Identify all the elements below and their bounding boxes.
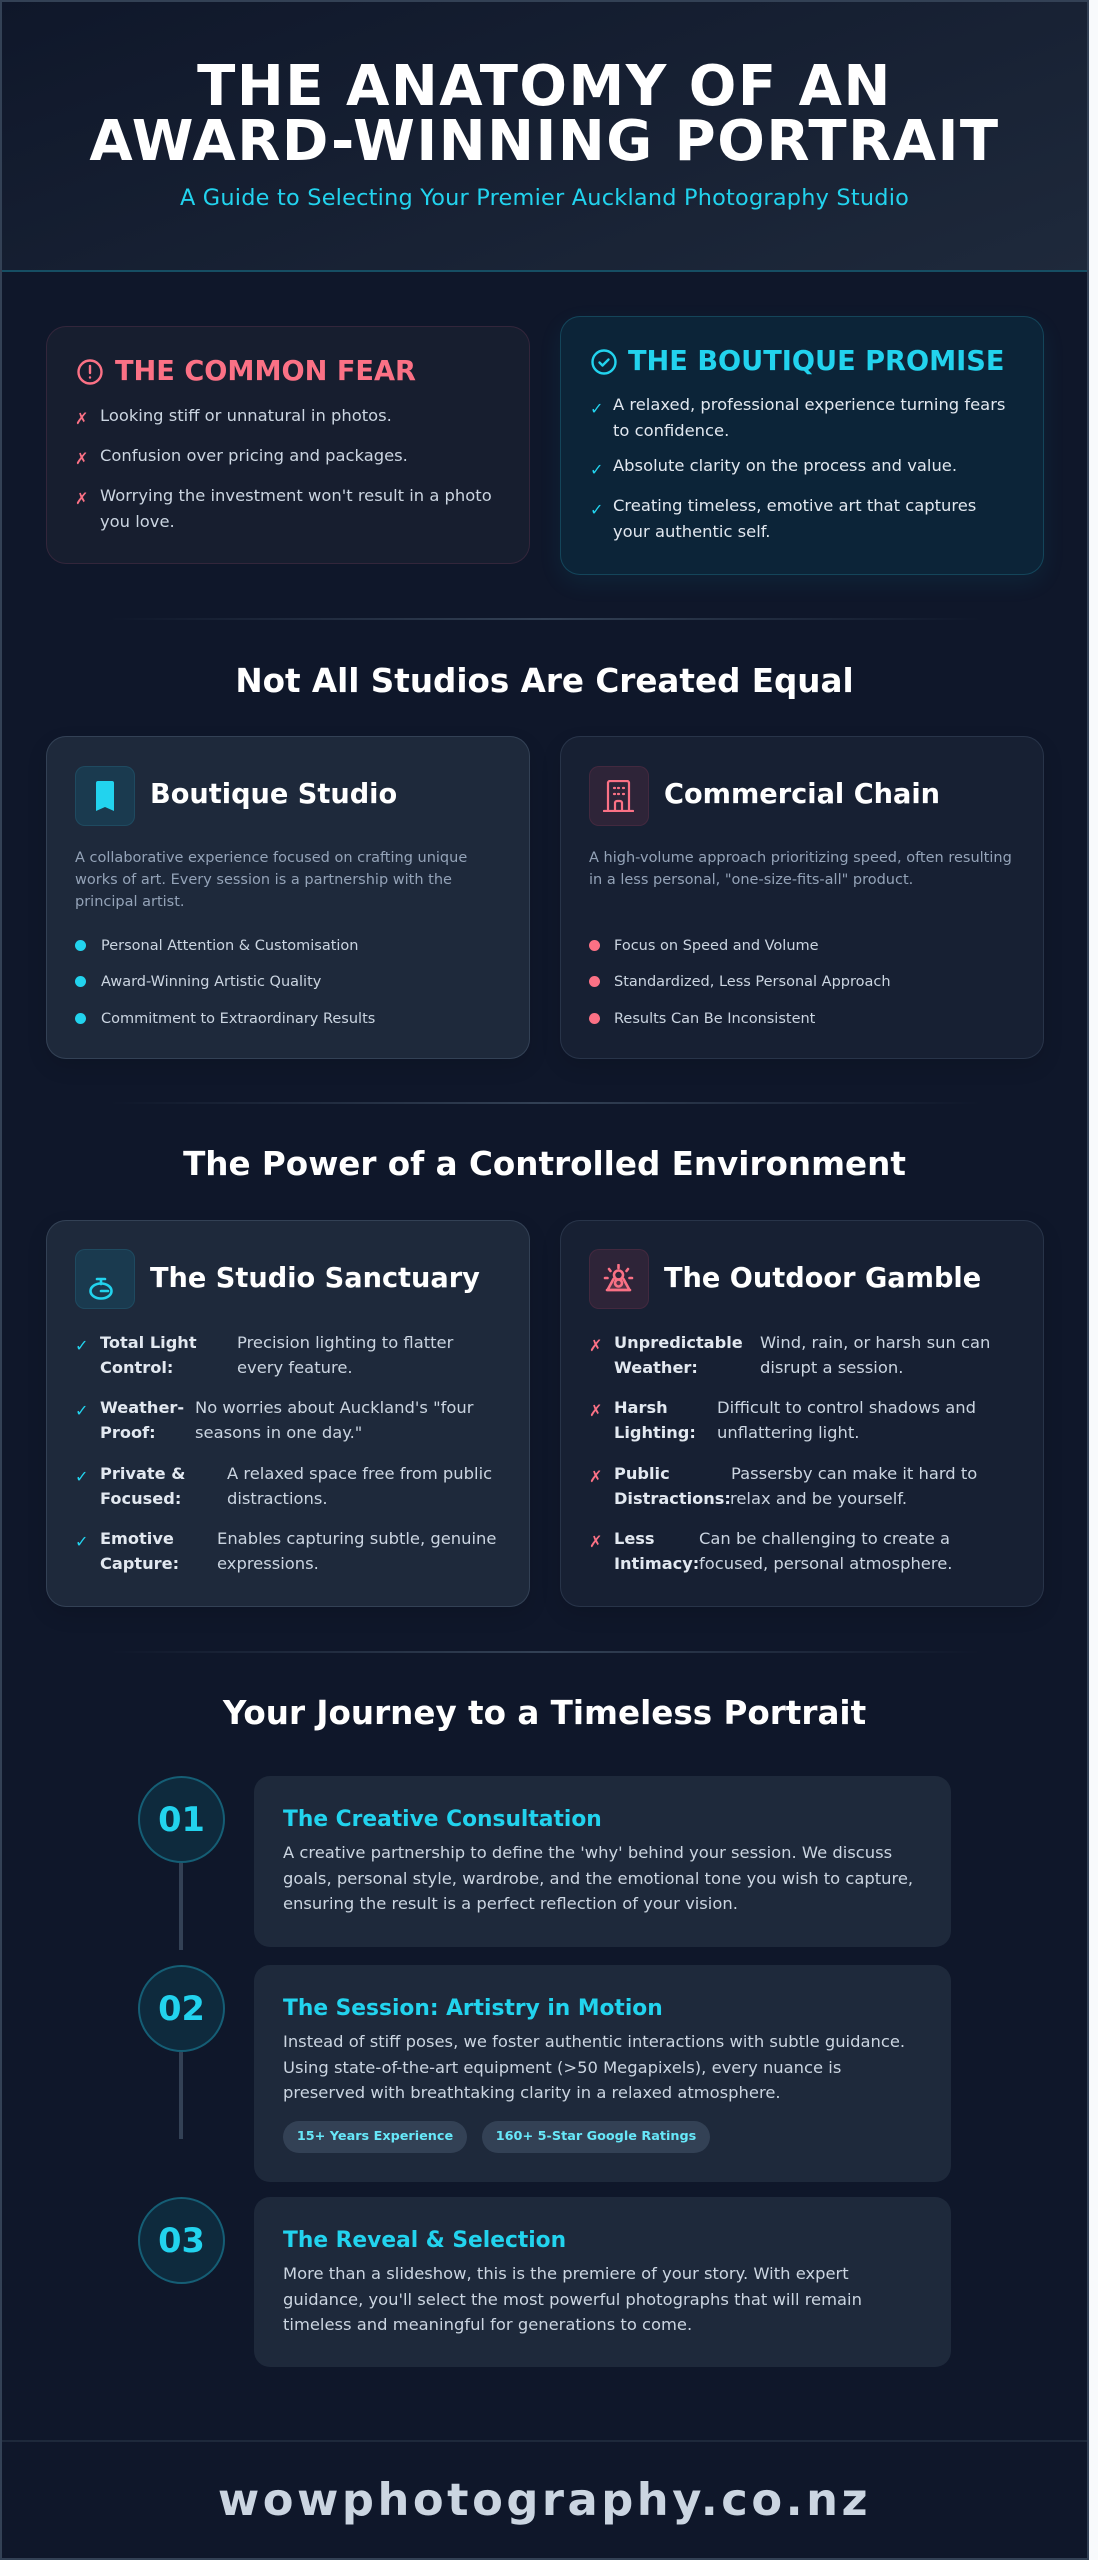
item: harsh lighting: [589, 1398, 976, 1442]
item: harsh lighting: Lighting:: [614, 1423, 696, 1442]
item: emotive capture: Enables capturing subtle, genuine: [217, 1529, 496, 1548]
badge: experience: 15+ Years Experience: [297, 2129, 453, 2144]
step text: guidance, you'll select the most powerful photographs that will remain: [283, 2290, 862, 2308]
fear item 2: ✗: [75, 449, 88, 468]
item: harsh lighting: Harsh: [614, 1398, 668, 1417]
item: total light control: ✓: [75, 1336, 88, 1355]
step title: The Session: Artistry in Motion: [283, 1996, 663, 2021]
panel: studio sanctuary: [46, 1220, 530, 1607]
card title: The Outdoor Gamble: [664, 1263, 981, 1294]
item: less intimacy: focused, personal atmosphere.: [699, 1554, 952, 1573]
header: [0, 0, 1089, 272]
step text: [283, 2264, 862, 2334]
step text: goals, personal style, wardrobe, and the emotional tone you wish to capture,: [283, 1868, 913, 1888]
step 1 number: 01: [158, 1800, 205, 1839]
icon: studio: [75, 1249, 135, 1309]
item: weather-proof: Weather-: [100, 1398, 184, 1417]
item: emotive capture: Emotive: [100, 1529, 174, 1548]
step 3 number: [138, 2197, 225, 2284]
promise item 3: your authentic self.: [613, 522, 770, 541]
card title: The Studio Sanctuary: [150, 1263, 480, 1294]
icon: check circle: [591, 349, 617, 375]
fear item 3: ✗: [75, 489, 88, 508]
footer website: wowphotography.co.nz: [218, 2473, 871, 2526]
item: unpredictable weather: Weather:: [614, 1358, 698, 1377]
item: public distractions: Public: [614, 1464, 670, 1483]
item: unpredictable weather: Wind, rain, or harsh sun can: [760, 1333, 990, 1352]
item: weather-proof: seasons in one day.": [195, 1423, 362, 1442]
badge: ratings: 160+ 5-Star Google Ratings: [496, 2129, 696, 2144]
footer: [0, 2440, 1089, 2560]
heading: the boutique promise: THE BOUTIQUE PROMISE: [628, 346, 1004, 377]
item: weather-proof: [75, 1398, 474, 1442]
item: emotive capture: expressions.: [217, 1554, 319, 1573]
fear item 3: you love.: [100, 512, 175, 531]
item: harsh lighting: Difficult to control shadows and: [717, 1398, 976, 1417]
item: public distractions: relax and be yourself.: [730, 1489, 907, 1508]
item: emotive capture: Capture:: [100, 1554, 179, 1573]
promise item 1: to confidence.: [613, 421, 729, 440]
item: weather-proof: Proof:: [100, 1423, 156, 1442]
panel: boutique studio: [46, 736, 530, 1059]
item: less intimacy: Less: [614, 1529, 655, 1548]
item: total light control: Total Light: [100, 1333, 197, 1352]
item: weather-proof: No worries about Auckland's "four: [195, 1398, 473, 1417]
promise item 2: Absolute clarity on the process and value.: [613, 456, 957, 475]
fear item 1: ✗: [75, 409, 88, 428]
heading: the common fear: THE COMMON FEAR: [115, 356, 416, 387]
badge: ratings: [482, 2121, 710, 2153]
item: total light control: [75, 1333, 454, 1377]
promise item 3: ✓: [590, 500, 603, 519]
step title: The Creative Consultation: [283, 1807, 602, 1832]
item: less intimacy: Intimacy:: [614, 1554, 699, 1573]
fear item 2: Confusion over pricing and packages.: [100, 446, 408, 465]
item: total light control: Precision lighting to flatter: [237, 1333, 453, 1352]
item: emotive capture: [75, 1529, 496, 1573]
description: A collaborative experience focused on crafting unique: [75, 850, 467, 866]
badge: experience: [283, 2121, 467, 2153]
icon: outdoor: [589, 1249, 649, 1309]
step text: More than a slideshow, this is the premiere of your story. With expert: [283, 2264, 849, 2283]
item: private and focused: A relaxed space free from public: [227, 1464, 492, 1483]
description: [589, 850, 1012, 888]
step text: [283, 1843, 913, 1913]
step 1 number: [138, 1776, 225, 1863]
item: private and focused: Focused:: [100, 1489, 181, 1508]
panel: commercial chain: [560, 736, 1044, 1059]
description: in a less personal, "one-size-fits-all" product.: [589, 872, 913, 888]
step 2 number: [138, 1965, 225, 2052]
item: private and focused: [75, 1464, 492, 1508]
item: private and focused: distractions.: [227, 1489, 328, 1508]
item: harsh lighting: unflattering light.: [717, 1423, 860, 1442]
step text: A creative partnership to define the 'why' behind your session. We discuss: [283, 1843, 892, 1862]
step text: preserved with breathtaking clarity in a relaxed atmosphere.: [283, 2083, 781, 2102]
icon: building: [589, 766, 649, 826]
step 3 number: 03: [158, 2221, 205, 2260]
feature list: Award-Winning Artistic Quality: [101, 974, 321, 990]
item: less intimacy: ✗: [589, 1532, 602, 1551]
fear item 3: Worrying the investment won't result in a photo: [100, 486, 492, 505]
promise item 3: Creating timeless, emotive art that captures: [613, 496, 976, 515]
panel: the common fear: [46, 326, 530, 564]
feature list: Results Can Be Inconsistent: [614, 1011, 815, 1027]
item: public distractions: Distractions:: [614, 1489, 731, 1508]
step text: Instead of stiff poses, we foster authentic interactions with subtle guidance.: [283, 2032, 905, 2051]
step text: [283, 2032, 905, 2102]
fear item 3: [75, 486, 492, 531]
item: private and focused: Private &: [100, 1464, 185, 1483]
item: unpredictable weather: [589, 1333, 990, 1377]
fear item 1: Looking stiff or unnatural in photos.: [100, 406, 392, 425]
item: harsh lighting: ✗: [589, 1401, 602, 1420]
promise item 1: [590, 395, 1005, 440]
card title: Commercial Chain: [664, 779, 940, 810]
item: total light control: every feature.: [237, 1358, 353, 1377]
title: AWARD-WINNING PORTRAIT: [89, 109, 1000, 174]
step 1 card: [254, 1776, 951, 1947]
item: public distractions: [589, 1464, 977, 1508]
item: total light control: Control:: [100, 1358, 173, 1377]
step 2 number: 02: [158, 1989, 205, 2028]
icon: bookmark: [75, 766, 135, 826]
title: [89, 54, 1000, 174]
heading: not all studios: Not All Studios Are Created Equal: [235, 662, 854, 700]
item: less intimacy: Can be challenging to create a: [699, 1529, 950, 1548]
item: weather-proof: ✓: [75, 1401, 88, 1420]
item: unpredictable weather: Unpredictable: [614, 1333, 743, 1352]
step title: The Reveal & Selection: [283, 2228, 566, 2253]
panel: outdoor gamble: [560, 1220, 1044, 1607]
icon: alert circle: [77, 359, 103, 385]
feature list: Focus on Speed and Volume: [614, 938, 819, 954]
description: A high-volume approach prioritizing speed, often resulting: [589, 850, 1012, 866]
description: works of art. Every session is a partnership with the: [75, 872, 452, 888]
description: [75, 850, 467, 910]
subtitle: A Guide to Selecting Your Premier Auckland Photography Studio: [180, 185, 909, 211]
feature list: Personal Attention & Customisation: [101, 938, 358, 954]
step text: ensuring the result is a perfect reflection of your vision.: [283, 1894, 738, 1913]
step 2 card: [254, 1965, 951, 2182]
promise item 2: ✓: [590, 460, 603, 479]
panel: the boutique promise: [560, 316, 1044, 575]
title: THE ANATOMY OF AN: [197, 54, 892, 119]
card title: Boutique Studio: [150, 779, 397, 810]
promise item 1: A relaxed, professional experience turning fears: [613, 395, 1005, 414]
item: unpredictable weather: disrupt a session.: [760, 1358, 903, 1377]
promise item 1: ✓: [590, 399, 603, 418]
item: emotive capture: ✓: [75, 1532, 88, 1551]
item: public distractions: Passersby can make it hard to: [731, 1464, 977, 1483]
item: less intimacy: [589, 1529, 952, 1573]
feature list: [589, 938, 891, 1027]
step 3 card: [254, 2197, 951, 2367]
step text: timeless and meaningful for generations to come.: [283, 2315, 692, 2334]
item: private and focused: ✓: [75, 1467, 88, 1486]
feature list: Commitment to Extraordinary Results: [101, 1011, 375, 1027]
description: principal artist.: [75, 894, 185, 910]
feature list: [75, 938, 375, 1027]
feature list: Standardized, Less Personal Approach: [614, 974, 891, 990]
heading: controlled environment: The Power of a Controlled Environment: [183, 1145, 906, 1183]
item: public distractions: ✗: [589, 1467, 602, 1486]
item: unpredictable weather: ✗: [589, 1336, 602, 1355]
promise item 3: [590, 496, 976, 541]
step text: Using state-of-the-art equipment (>50 Megapixels), every nuance is: [283, 2058, 841, 2076]
heading: your journey: Your Journey to a Timeless Portrait: [223, 1694, 866, 1732]
